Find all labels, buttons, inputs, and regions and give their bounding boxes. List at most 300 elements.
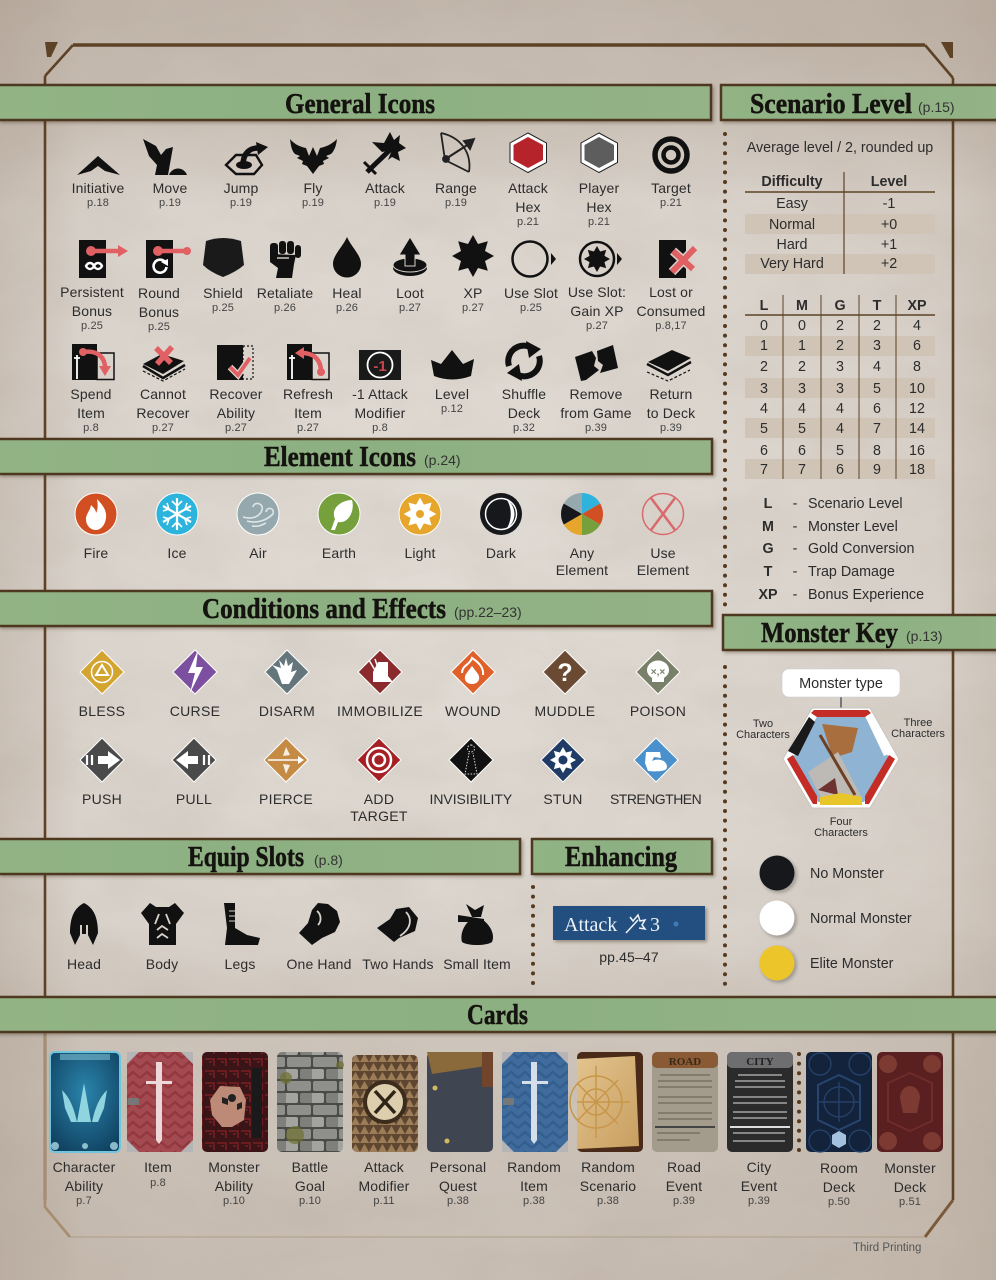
icon: monster standee hex bbox=[783, 708, 899, 808]
heading band: Element Icons: (p.24) bbox=[424, 452, 461, 468]
heading band: General Icons bbox=[0, 85, 714, 123]
table: difficulty: Hard bbox=[776, 237, 808, 253]
label: -1 attack modifier: Modifier bbox=[354, 405, 406, 421]
text: average level: Average level / 2, rounded up bbox=[747, 140, 933, 156]
label: retaliate: p.26 bbox=[274, 302, 296, 314]
table: level values: 2 bbox=[836, 338, 844, 354]
label: spend item: Spend bbox=[70, 386, 112, 402]
label: monster deck: p.51 bbox=[899, 1196, 921, 1208]
label: pierce: PIERCE bbox=[259, 791, 313, 807]
icon: player hex bbox=[581, 133, 618, 172]
legend: table abbreviations: M bbox=[762, 519, 774, 535]
icon: return to deck bbox=[647, 350, 691, 381]
heading band: Cards bbox=[0, 997, 996, 1035]
marker: normal monster bbox=[760, 900, 912, 938]
table: level values: 0 bbox=[798, 318, 806, 334]
icon: recover ability bbox=[217, 345, 253, 380]
icon: initiative bbox=[77, 156, 120, 175]
label: road event: Road bbox=[667, 1159, 701, 1175]
label: recover ability: Recover bbox=[209, 386, 263, 402]
table: level values: 1 bbox=[760, 338, 768, 354]
table: level values: 4 bbox=[836, 421, 844, 437]
legend: table abbreviations: Bonus Experience bbox=[808, 587, 924, 603]
icon: muddle bbox=[543, 650, 587, 694]
label: use slot gain xp: p.27 bbox=[586, 320, 608, 332]
label: player hex: Hex bbox=[586, 199, 612, 215]
enhancement sticker: Attack bbox=[564, 914, 617, 936]
icon: attack hex bbox=[510, 133, 546, 172]
card: battle goal bbox=[277, 1052, 344, 1152]
label: attack: Attack bbox=[365, 180, 405, 196]
table: level values: 18 bbox=[909, 462, 925, 478]
table: level values: 6 bbox=[760, 443, 768, 459]
label: remove from game: Remove bbox=[569, 386, 623, 402]
heading band: Monster Key: (p.13) bbox=[906, 628, 943, 644]
callout: monster type bbox=[782, 669, 900, 708]
table: level values: 6 bbox=[836, 462, 844, 478]
icon: use slot bbox=[512, 242, 556, 276]
label: three characters: Characters bbox=[891, 728, 945, 740]
legend: table abbreviations: G bbox=[762, 541, 774, 557]
icon: small item bbox=[458, 904, 493, 945]
label: random scenario: Scenario bbox=[580, 1178, 636, 1194]
label: shuffle deck: p.32 bbox=[513, 422, 535, 434]
table: level values bbox=[745, 295, 935, 479]
icon: lost or consumed bbox=[659, 240, 695, 278]
label: cannot recover: p.27 bbox=[152, 422, 174, 434]
icon: range bbox=[441, 133, 474, 172]
legend: table abbreviations: Trap Damage bbox=[808, 564, 895, 580]
table: level values: 6 bbox=[913, 338, 921, 354]
card: item bbox=[127, 1052, 193, 1152]
table: level values: 2 bbox=[836, 318, 844, 334]
card: random item bbox=[502, 1052, 568, 1152]
label: fire: Fire bbox=[84, 545, 108, 561]
label: character ability: Character bbox=[53, 1159, 115, 1175]
label: cannot recover: Cannot bbox=[140, 386, 186, 402]
label: body: Body bbox=[146, 956, 178, 972]
label: round bonus: p.25 bbox=[148, 321, 170, 333]
label: refresh item: Refresh bbox=[283, 386, 333, 402]
icon: light bbox=[399, 493, 441, 535]
label: lost or consumed: Consumed bbox=[637, 303, 705, 319]
card: road event bbox=[652, 1052, 718, 1152]
icon: retaliate bbox=[270, 241, 301, 278]
label: random item: Random bbox=[507, 1159, 561, 1175]
icon: add target bbox=[357, 738, 401, 782]
icon: earth bbox=[318, 493, 360, 535]
table: level values: T bbox=[873, 298, 882, 314]
label: attack hex: Hex bbox=[515, 199, 541, 215]
label: player hex: p.21 bbox=[588, 216, 610, 228]
heading band: Monster Key bbox=[723, 615, 996, 653]
label: personal quest: p.38 bbox=[447, 1195, 469, 1207]
icon: spend item bbox=[72, 344, 114, 380]
legend: table abbreviations: - bbox=[793, 519, 798, 535]
table: difficulty: Easy bbox=[776, 196, 809, 212]
table: level values: 12 bbox=[909, 401, 925, 417]
label: bless: BLESS bbox=[79, 703, 125, 719]
label: poison: POISON bbox=[630, 703, 686, 719]
label: lost or consumed: Lost or bbox=[649, 284, 693, 300]
icon: remove from game bbox=[575, 345, 618, 381]
label: add target: TARGET bbox=[350, 808, 408, 824]
enhancement sticker: 3 bbox=[650, 914, 660, 936]
table: level values: 3 bbox=[798, 381, 806, 397]
table: level values: 4 bbox=[760, 401, 768, 417]
label: random scenario: Random bbox=[581, 1159, 635, 1175]
label: road event: p.39 bbox=[673, 1195, 695, 1207]
heading band: Element Icons bbox=[0, 439, 715, 477]
label: air: Air bbox=[249, 545, 267, 561]
card: monster ability bbox=[202, 1052, 268, 1152]
label: attack modifier: Attack bbox=[364, 1159, 404, 1175]
table: level values: M bbox=[796, 298, 808, 314]
label: xp: XP bbox=[464, 285, 482, 301]
label: cannot recover: Recover bbox=[136, 405, 190, 421]
label: two hands: Two Hands bbox=[362, 956, 434, 972]
table: level values: 2 bbox=[798, 359, 806, 375]
legend: table abbreviations: Monster Level bbox=[808, 519, 898, 535]
table: level values: 4 bbox=[913, 318, 921, 334]
heading band: Element Icons: Element Icons bbox=[264, 442, 416, 473]
heading band: Cards: Cards bbox=[467, 1000, 528, 1031]
label: four characters: Characters bbox=[814, 827, 868, 839]
label: random item: Item bbox=[520, 1178, 548, 1194]
label: character ability: p.7 bbox=[76, 1195, 92, 1207]
label: push: PUSH bbox=[82, 791, 122, 807]
card: personal quest bbox=[427, 1052, 493, 1152]
heading band: Equip Slots: Equip Slots bbox=[188, 842, 304, 873]
label: jump: p.19 bbox=[230, 197, 252, 209]
table: difficulty: Difficulty bbox=[761, 174, 823, 190]
icon: loot bbox=[393, 237, 427, 276]
label: enhancing pages: pp.45–47 bbox=[599, 949, 659, 965]
icon: fire bbox=[75, 493, 117, 535]
table: level values: XP bbox=[907, 298, 927, 314]
label: xp: p.27 bbox=[462, 302, 484, 314]
label: fly: Fly bbox=[303, 180, 323, 196]
label: lost or consumed: p.8,17 bbox=[655, 320, 687, 332]
label: character ability: Ability bbox=[65, 1178, 103, 1194]
label: use element: Element bbox=[637, 562, 689, 578]
icon: muddle: ? bbox=[557, 659, 573, 687]
icon: use element bbox=[642, 494, 684, 534]
table: level values: 8 bbox=[913, 359, 921, 375]
heading band: Monster Key: Monster Key bbox=[761, 618, 898, 649]
label: remove from game: from Game bbox=[560, 405, 632, 421]
icon: -1 attack modifier: -1 bbox=[373, 358, 387, 375]
label: any element: Any bbox=[570, 545, 594, 561]
table: level values: 10 bbox=[909, 381, 925, 397]
table: level values: 7 bbox=[798, 462, 806, 478]
legend: table abbreviations: Scenario Level bbox=[808, 496, 903, 512]
card: monster deck bbox=[877, 1052, 943, 1152]
label: return to deck: to Deck bbox=[647, 405, 696, 421]
label: shield: Shield bbox=[203, 285, 243, 301]
icon: wound bbox=[451, 650, 495, 694]
label: personal quest: Personal bbox=[430, 1159, 486, 1175]
label: round bonus: Round bbox=[138, 285, 180, 301]
footer: third printing: Third Printing bbox=[853, 1242, 921, 1254]
label: refresh item: Item bbox=[294, 405, 322, 421]
card: character ability bbox=[50, 1052, 120, 1152]
label: battle goal: p.10 bbox=[299, 1195, 321, 1207]
table: difficulty: Very Hard bbox=[760, 256, 824, 272]
label: random item: p.38 bbox=[523, 1195, 545, 1207]
label: one hand: One Hand bbox=[286, 956, 352, 972]
label: item: Item bbox=[144, 1159, 172, 1175]
label: return to deck: Return bbox=[650, 386, 692, 402]
icon: body bbox=[141, 903, 184, 945]
label: attack: p.19 bbox=[374, 197, 396, 209]
label: monster deck: Monster bbox=[884, 1160, 936, 1176]
label: item: p.8 bbox=[150, 1177, 166, 1189]
heading band: General Icons: General Icons bbox=[285, 89, 435, 120]
card: road event: ROAD bbox=[669, 1056, 701, 1068]
label: -1 attack modifier: p.8 bbox=[372, 422, 388, 434]
label: round bonus: Bonus bbox=[139, 304, 179, 320]
legend: table abbreviations: Gold Conversion bbox=[808, 541, 915, 557]
icon: refresh item bbox=[287, 344, 329, 380]
table: level values: 2 bbox=[873, 318, 881, 334]
label: city event: Event bbox=[741, 1178, 777, 1194]
icon: dark bbox=[480, 493, 522, 535]
icon: use slot gain xp bbox=[580, 242, 622, 276]
table: difficulty: -1 bbox=[883, 196, 895, 212]
marker: no monster: No Monster bbox=[810, 866, 884, 882]
icon: jump bbox=[226, 142, 268, 174]
label: monster ability: Monster bbox=[208, 1159, 260, 1175]
label: battle goal: Goal bbox=[295, 1178, 325, 1194]
label: initiative: p.18 bbox=[87, 197, 109, 209]
icon: stun bbox=[541, 738, 585, 782]
label: monster ability: p.10 bbox=[223, 1195, 245, 1207]
heading band: Enhancing bbox=[532, 839, 715, 877]
label: head: Head bbox=[67, 956, 101, 972]
table: difficulty bbox=[745, 172, 935, 274]
label: persistent bonus: Bonus bbox=[72, 303, 112, 319]
label: invisibility: INVISIBILITY bbox=[430, 791, 513, 807]
label: range: Range bbox=[435, 180, 477, 196]
table: level values: 3 bbox=[873, 338, 881, 354]
heading band: Conditions and Effects bbox=[0, 591, 715, 629]
label: stun: STUN bbox=[543, 791, 583, 807]
heading band: Scenario Level bbox=[721, 85, 996, 123]
label: room deck: p.50 bbox=[828, 1196, 850, 1208]
table: level values: 6 bbox=[873, 401, 881, 417]
panel: cards bbox=[50, 1052, 943, 1208]
label: spend item: Item bbox=[77, 405, 105, 421]
icon: persistent bonus bbox=[79, 240, 128, 278]
heading band: Equip Slots bbox=[0, 839, 523, 877]
label: attack modifier: Modifier bbox=[358, 1178, 410, 1194]
label: attack modifier: p.11 bbox=[373, 1195, 395, 1207]
label: shuffle deck: Shuffle bbox=[502, 386, 546, 402]
label: add target: ADD bbox=[364, 791, 394, 807]
table: level values: L bbox=[760, 298, 769, 314]
panel: conditions and effects bbox=[79, 650, 702, 824]
label: legs: Legs bbox=[225, 956, 255, 972]
enhancement sticker bbox=[553, 906, 707, 942]
icon: cannot recover bbox=[143, 347, 185, 381]
table: difficulty: +0 bbox=[881, 217, 897, 233]
icon: target bbox=[655, 139, 687, 171]
table: difficulty: +1 bbox=[881, 237, 897, 253]
label: heal: p.26 bbox=[336, 302, 358, 314]
legend: table abbreviations: L bbox=[764, 496, 773, 512]
icon: bless bbox=[80, 650, 124, 694]
label: pull: PULL bbox=[176, 791, 212, 807]
table: level values: 16 bbox=[909, 443, 925, 459]
icon: -1 attack modifier bbox=[359, 350, 401, 380]
label: two characters: Characters bbox=[736, 729, 790, 741]
marker: elite monster: Elite Monster bbox=[810, 956, 894, 972]
icon: round bonus bbox=[146, 240, 191, 278]
table: level values: 5 bbox=[760, 421, 768, 437]
legend: table abbreviations: XP bbox=[758, 587, 778, 603]
table: level values: 7 bbox=[873, 421, 881, 437]
marker: elite monster bbox=[760, 946, 894, 983]
card: city event: CITY bbox=[746, 1056, 774, 1068]
table: level values: 4 bbox=[836, 401, 844, 417]
table: level values: 4 bbox=[873, 359, 881, 375]
label: move: p.19 bbox=[159, 197, 181, 209]
label: use slot gain xp: Gain XP bbox=[570, 303, 624, 319]
label: level: Level bbox=[435, 386, 469, 402]
icon: shuffle deck bbox=[507, 341, 541, 381]
panel: monster key bbox=[736, 669, 945, 983]
table: level values: 5 bbox=[836, 443, 844, 459]
label: refresh item: p.27 bbox=[297, 422, 319, 434]
panel: scenario level bbox=[745, 140, 935, 603]
marker: no monster bbox=[760, 856, 884, 893]
legend: table abbreviations: - bbox=[793, 496, 798, 512]
label: muddle: MUDDLE bbox=[535, 703, 595, 719]
label: move: Move bbox=[153, 180, 187, 196]
panel: element icons bbox=[75, 493, 689, 578]
label: player hex: Player bbox=[579, 180, 619, 196]
label: attack hex: p.21 bbox=[517, 216, 539, 228]
label: two characters: Two bbox=[753, 718, 773, 730]
callout: monster type: Monster type bbox=[799, 676, 883, 692]
label: persistent bonus: p.25 bbox=[81, 320, 103, 332]
label: light: Light bbox=[404, 545, 436, 561]
heading band: Scenario Level: Scenario Level bbox=[750, 89, 912, 120]
label: road event: Event bbox=[666, 1178, 702, 1194]
table: level values: 5 bbox=[873, 381, 881, 397]
label: four characters: Four bbox=[830, 816, 852, 828]
table: level values: 3 bbox=[836, 381, 844, 397]
icon: fly bbox=[290, 139, 337, 174]
label: remove from game: p.39 bbox=[585, 422, 607, 434]
label: dark: Dark bbox=[486, 545, 517, 561]
icon: two hands bbox=[377, 907, 418, 942]
label: target: Target bbox=[651, 180, 691, 196]
icon: immobilize bbox=[358, 650, 402, 694]
label: earth: Earth bbox=[322, 545, 356, 561]
label: use element: Use bbox=[650, 545, 676, 561]
panel: equip slots bbox=[67, 903, 511, 972]
icon: heal bbox=[333, 237, 361, 278]
label: use slot: Use Slot bbox=[504, 285, 558, 301]
label: three characters: Three bbox=[904, 717, 932, 729]
marker: normal monster: Normal Monster bbox=[810, 911, 912, 927]
table: level values: 6 bbox=[798, 443, 806, 459]
label: monster ability: Ability bbox=[215, 1178, 253, 1194]
label: city event: p.39 bbox=[748, 1195, 770, 1207]
label: use slot: p.25 bbox=[520, 302, 542, 314]
icon: one hand bbox=[299, 903, 340, 945]
icon: attack bbox=[364, 132, 406, 174]
icon: move bbox=[143, 139, 187, 175]
legend: table abbreviations: - bbox=[793, 587, 798, 603]
table: level values: 3 bbox=[836, 359, 844, 375]
label: room deck: Room bbox=[820, 1160, 858, 1176]
label: level: p.12 bbox=[441, 403, 463, 415]
table: level values: G bbox=[834, 298, 846, 314]
table: level values: 8 bbox=[873, 443, 881, 459]
table: level values: 7 bbox=[760, 462, 768, 478]
table: level values: 2 bbox=[760, 359, 768, 375]
table: difficulty: Level bbox=[871, 174, 907, 190]
card: attack modifier bbox=[352, 1055, 418, 1152]
icon: pierce bbox=[264, 738, 308, 782]
label: disarm: DISARM bbox=[259, 703, 315, 719]
card: room deck bbox=[806, 1052, 872, 1152]
icon: ice bbox=[156, 493, 198, 535]
icon: curse bbox=[173, 650, 217, 694]
label: -1 attack modifier: -1 Attack bbox=[352, 386, 408, 402]
label: fly: p.19 bbox=[302, 197, 324, 209]
icon: level crown bbox=[431, 350, 474, 380]
label: city event: City bbox=[747, 1159, 771, 1175]
label: target: p.21 bbox=[660, 197, 682, 209]
legend: table abbreviations: - bbox=[793, 541, 798, 557]
label: return to deck: p.39 bbox=[660, 422, 682, 434]
table: level values: 9 bbox=[873, 462, 881, 478]
icon: any element bbox=[561, 493, 603, 535]
icon: head bbox=[70, 903, 98, 945]
dotted dividers bbox=[533, 134, 799, 1152]
label: loot: Loot bbox=[396, 285, 424, 301]
label: loot: p.27 bbox=[399, 302, 421, 314]
label: recover ability: p.27 bbox=[225, 422, 247, 434]
table: difficulty: +2 bbox=[881, 256, 897, 272]
label: monster deck: Deck bbox=[894, 1179, 927, 1195]
label: ice: Ice bbox=[167, 545, 187, 561]
label: random scenario: p.38 bbox=[597, 1195, 619, 1207]
heading band: Conditions and Effects: (pp.22–23) bbox=[454, 604, 522, 620]
label: jump: Jump bbox=[224, 180, 258, 196]
table: level values: 14 bbox=[909, 421, 925, 437]
label: spend item: p.8 bbox=[83, 422, 99, 434]
label: battle goal: Battle bbox=[292, 1159, 328, 1175]
label: initiative: Initiative bbox=[72, 180, 124, 196]
label: shuffle deck: Deck bbox=[508, 405, 541, 421]
legend: table abbreviations: T bbox=[764, 564, 773, 580]
icon: poison: ×,× bbox=[651, 667, 665, 678]
panel: enhancing bbox=[553, 906, 707, 965]
label: room deck: Deck bbox=[823, 1179, 856, 1195]
legend: table abbreviations: - bbox=[793, 564, 798, 580]
label: any element: Element bbox=[556, 562, 608, 578]
table: difficulty: Normal bbox=[769, 217, 815, 233]
label: use slot gain xp: Use Slot: bbox=[568, 284, 626, 300]
heading band: Scenario Level: (p.15) bbox=[918, 99, 955, 115]
card: city event bbox=[727, 1052, 793, 1152]
table: level values: 1 bbox=[798, 338, 806, 354]
